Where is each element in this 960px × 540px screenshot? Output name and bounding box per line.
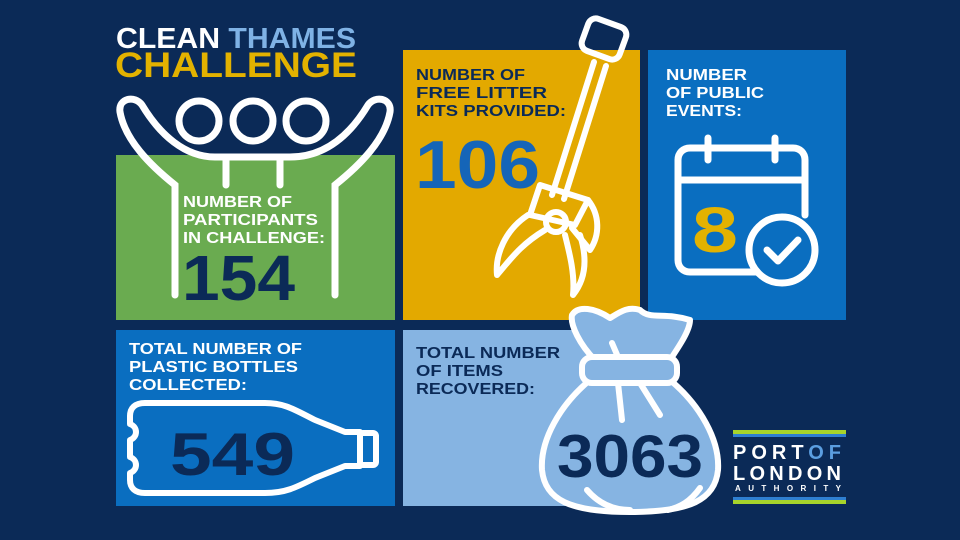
number: 8: 8 [692,194,738,266]
text: items label: RECOVERED: [416,381,535,398]
text: events label: OF PUBLIC [666,85,765,102]
text: items label [416,345,561,398]
logo: Port of London Authority: AUTHORITY [735,484,842,493]
number: 3063: 3063 [557,423,703,490]
title: CHALLENGE [115,46,357,85]
text: bottles label [129,341,302,394]
logo: Port of London Authority: LONDON [733,463,841,485]
icon: bottle [130,403,376,493]
text: items label: OF ITEMS [416,363,503,380]
text: participants label [183,194,325,247]
icon: litter picker [497,16,629,295]
text: participants label: IN CHALLENGE: [183,230,325,247]
logo: Port of London Authority: PORTOF [733,442,841,464]
text: events label: EVENTS: [666,103,742,120]
text: kits label [416,67,566,120]
number: 106: 106 [415,127,540,203]
icon: raised hands group [120,99,390,295]
number: 154: 154 [182,242,295,314]
text: kits label: KITS PROVIDED: [416,103,566,120]
logo: Port of London Authority [733,430,846,504]
icon: sack [542,309,718,512]
text: events label [666,67,765,120]
text: participants label: PARTICIPANTS [183,212,318,229]
panel: litter kits [403,16,640,320]
title [115,23,357,85]
title: CLEAN THAMES [116,23,356,55]
text: bottles label: TOTAL NUMBER OF [129,341,302,358]
text: bottles label: PLASTIC BOTTLES [129,359,298,376]
number: 549: 549 [170,421,295,488]
text: items label: TOTAL NUMBER [416,345,561,362]
text: kits label: FREE LITTER [416,85,548,102]
panel: items recovered [403,309,718,512]
panel: public events [648,50,846,320]
text: events label: NUMBER [666,67,748,84]
text: participants label: NUMBER OF [183,194,292,211]
panel: participants [116,99,395,320]
text: kits label: NUMBER OF [416,67,525,84]
panel: plastic bottles [116,330,395,506]
text: bottles label: COLLECTED: [129,377,247,394]
icon: calendar with check [678,138,815,283]
